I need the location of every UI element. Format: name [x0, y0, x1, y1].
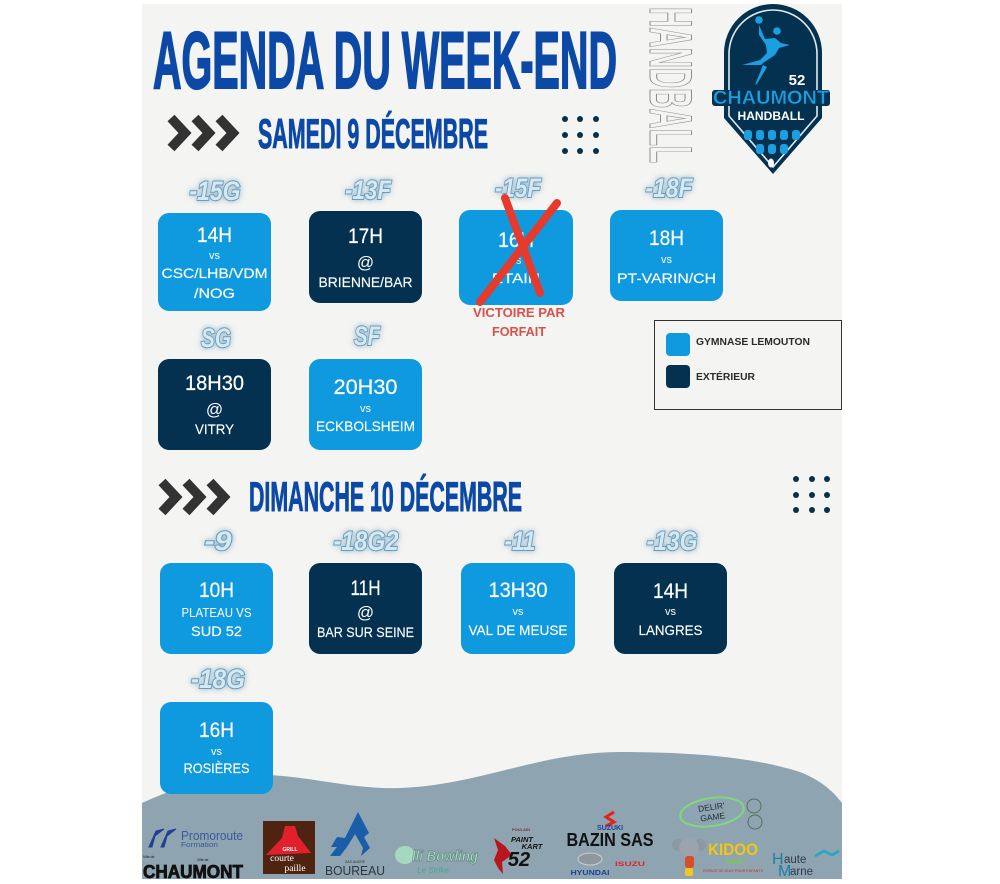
sponsor: Bazin SAS: BAZIN SAS — [566, 830, 654, 850]
card SF: 20H30 — [334, 376, 398, 399]
team label SF: SF — [354, 321, 381, 351]
legend: GYMNASE LEMOUTON — [696, 336, 810, 348]
sponsor: Kidoo Park: KIDOO — [708, 840, 758, 859]
sponsor: Delir Game: DELIR' — [697, 800, 726, 814]
card SF — [309, 359, 422, 450]
dots sunday — [793, 476, 830, 513]
icon: arrows sunday — [162, 482, 224, 512]
card -18G: 16H — [199, 719, 234, 742]
card -15G: /NOG — [194, 285, 235, 301]
card -15F cancelled: 16H — [498, 229, 534, 252]
club logo: CHAUMONT — [713, 88, 829, 109]
sponsor: Bazin SAS: SUZUKI — [597, 825, 623, 832]
sponsor: Kidoo Park: ESPACE DE JEUX POUR ENFANTS — [703, 868, 763, 873]
card -9: 10H — [199, 579, 234, 602]
card -15G — [158, 213, 271, 311]
team label -13G: -13G — [646, 526, 698, 556]
card SG — [158, 359, 271, 450]
card -18G — [160, 702, 273, 794]
card -13F — [309, 211, 422, 303]
team label -11: -11 — [504, 526, 536, 556]
card -11 — [461, 563, 575, 654]
sponsor: Boureau: SAS ANDRE — [345, 860, 366, 864]
card -18F — [610, 210, 723, 301]
card -18G2: 11H — [350, 577, 380, 600]
sponsor: Delir Game: GAME — [700, 810, 726, 824]
sponsor: Haute-Marne: aute — [784, 854, 806, 866]
text: HANDBALL — [637, 7, 704, 163]
card -13G — [614, 563, 727, 654]
icon: arrows saturday — [171, 118, 233, 148]
card -9: PLATEAU VS — [182, 605, 252, 620]
forfeit note: VICTOIRE PAR — [473, 305, 566, 320]
bottom wave — [142, 752, 842, 879]
club logo: 52 — [789, 72, 805, 89]
card -18G: ROSIÈRES — [184, 760, 250, 776]
sponsor: Promoroute: Formation — [181, 840, 218, 849]
card -18G2: BAR SUR SEINE — [317, 624, 414, 640]
forfeit note — [473, 305, 566, 339]
sponsor: Paint Kart 52: 52 — [508, 849, 530, 871]
sponsor: Paint Kart 52: PAINT — [511, 835, 534, 844]
heading: sunday: DIMANCHE 10 DÉCEMBRE — [249, 473, 522, 520]
sponsor: Paint Kart 52: KART — [522, 842, 544, 851]
card -15F cancelled — [459, 198, 573, 305]
card -15G: CSC/LHB/VDM — [162, 265, 268, 281]
sponsor: Ville de Chaumont: Ville de — [197, 858, 208, 862]
team label -15G: -15G — [190, 176, 240, 206]
card SG: VITRY — [195, 421, 235, 437]
team label SG: SG — [201, 323, 231, 353]
sponsor: Olli Bowling — [395, 846, 478, 875]
sponsor: Haute-Marne: H — [772, 851, 784, 868]
team label -13F: -13F — [345, 175, 392, 205]
legend: EXTÉRIEUR — [696, 370, 755, 383]
sponsor: Ville de Chaumont: CHAUMONT — [143, 862, 243, 882]
card -15G: 14H — [197, 224, 232, 247]
icon: handball player — [742, 16, 790, 85]
card -9 — [160, 563, 273, 654]
card -13F: BRIENNE/BAR — [318, 274, 412, 290]
card -13F: 17H — [348, 225, 383, 248]
sponsor: Courtepaille: GRILL — [282, 847, 298, 853]
sponsor: Haute-Marne: arne — [790, 866, 813, 878]
club logo — [712, 4, 830, 174]
sponsor: Promoroute: Promoroute — [181, 828, 243, 843]
card -13F: @ — [357, 253, 374, 272]
card -18F: 18H — [649, 227, 684, 250]
poster background — [142, 4, 842, 879]
sponsor: Promoroute — [149, 828, 243, 849]
forfeit note: FORFAIT — [492, 324, 546, 339]
sponsor: Olli Bowling: lli Bowling — [412, 848, 478, 865]
card -13G: vs — [665, 606, 676, 618]
card -15G: vs — [209, 250, 220, 262]
card -11: VAL DE MEUSE — [468, 622, 568, 638]
team label -15F: -15F — [495, 173, 542, 203]
club logo: HANDBALL — [738, 111, 804, 123]
card SG: 18H30 — [185, 372, 244, 395]
sponsor: Bazin SAS — [566, 812, 654, 877]
card SF: vs — [360, 403, 372, 415]
sponsor: Paint Kart 52 — [494, 827, 544, 874]
team label -9: -9 — [204, 526, 232, 556]
sponsor: Bazin SAS: HYUNDAI — [570, 870, 610, 877]
heading: saturday: SAMEDI 9 DÉCEMBRE — [258, 110, 488, 157]
sponsor: Boureau — [325, 812, 385, 878]
sponsor: Courtepaille: paille — [284, 864, 306, 874]
card -11: vs — [512, 606, 524, 618]
sponsor: Courtepaille — [263, 821, 315, 874]
team label -18G: -18G — [191, 664, 245, 694]
sponsor: Delir Game — [678, 794, 762, 830]
icon: stadium arches — [744, 130, 800, 154]
sponsor: Bazin SAS: ISUZU — [615, 861, 645, 868]
sponsor: Kidoo Park — [672, 838, 763, 876]
card -18F: PT-VARIN/CH — [617, 270, 716, 286]
card -18G2 — [309, 563, 422, 654]
cross-out — [480, 198, 557, 302]
card -9: SUD 52 — [191, 623, 242, 639]
sponsor: Kidoo Park: PARK — [727, 860, 744, 866]
sponsor: Boureau: BOUREAU — [325, 864, 385, 878]
card -18G2: @ — [357, 603, 374, 622]
card -15F cancelled: ETAIN — [492, 270, 540, 286]
card -11: 13H30 — [488, 579, 548, 602]
team label -18F: -18F — [646, 173, 694, 203]
dots saturday — [562, 116, 599, 154]
sponsor: Haute-Marne: M — [778, 863, 791, 880]
card -13G: 14H — [653, 580, 688, 603]
card -13G: LANGRES — [638, 622, 702, 638]
card -18F: vs — [661, 254, 672, 266]
sponsor: Paint Kart 52: POULAIN — [512, 827, 530, 832]
sponsor: Ville de Chaumont: Ville de — [143, 855, 154, 859]
sponsor: Courtepaille: courte — [270, 854, 294, 864]
sponsor: Olli Bowling: Le Strike — [417, 866, 449, 875]
card SG: @ — [206, 400, 223, 419]
sponsor: Haute-Marne — [772, 851, 839, 880]
card -15F cancelled: vs — [510, 255, 522, 267]
team label -18G2: -18G2 — [334, 526, 398, 556]
legend — [654, 320, 842, 410]
card -18G: vs — [211, 746, 222, 758]
card SF: ECKBOLSHEIM — [316, 418, 415, 434]
